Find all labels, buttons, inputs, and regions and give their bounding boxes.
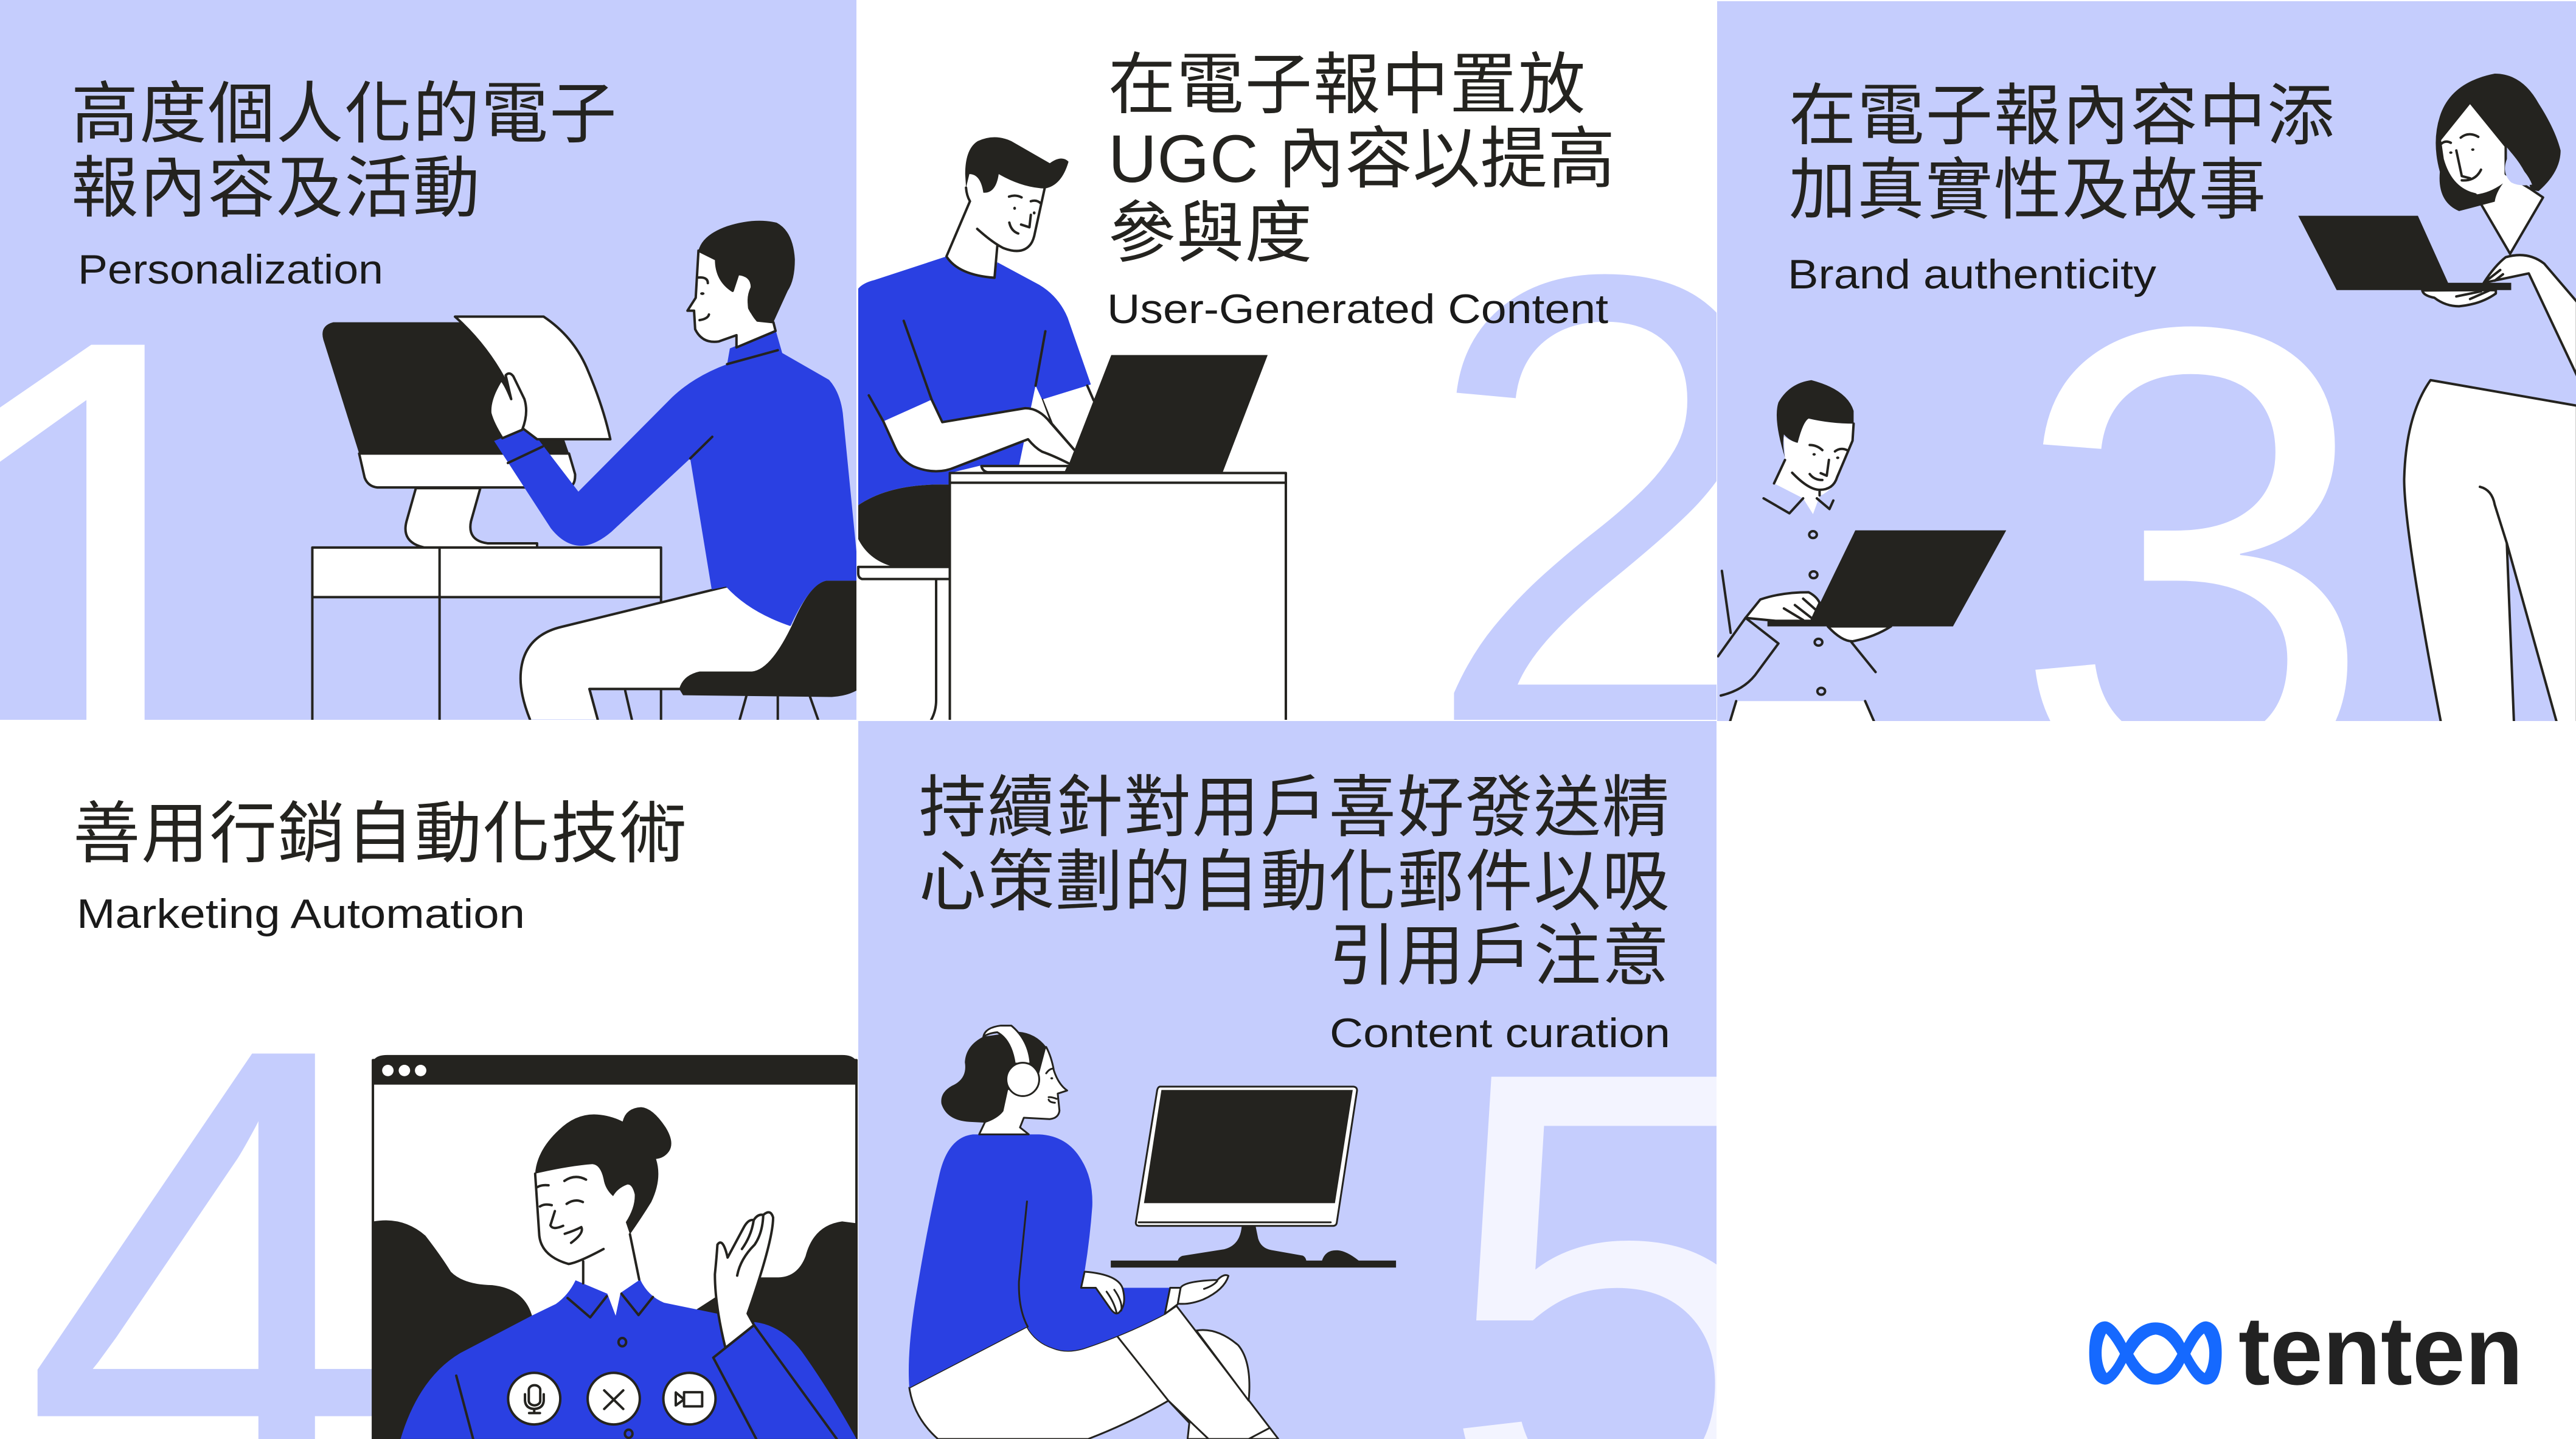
window frame: [373, 1060, 856, 1439]
subtitle 4: Marketing Automation: [77, 891, 525, 937]
subtitle 1: Personalization: [78, 246, 383, 293]
panel 5: content curation: [858, 721, 1803, 1439]
logo wordmark: tenten: [2238, 1296, 2523, 1405]
heading 5: [919, 770, 1670, 994]
icon: close: [588, 1373, 640, 1424]
heading 5: 心策劃的自動化郵件以吸: [919, 845, 1670, 919]
icon: microphone: [508, 1373, 560, 1424]
illustration: video call window: [372, 1055, 858, 1439]
heading 2: UGC 內容以提高: [1108, 122, 1616, 197]
panel 4: marketing automation: [22, 796, 858, 1439]
icon: video camera: [664, 1373, 715, 1424]
heading 5: 持續針對用戶喜好發送精: [919, 770, 1670, 845]
heading 1: 高度個人化的電子: [71, 77, 617, 152]
panel 3: brand authenticity: [1717, 1, 2576, 926]
heading 2: 在電子報中置放: [1108, 47, 1586, 122]
numeral 2: 2: [1421, 138, 1787, 874]
heading 3: 在電子報內容中添: [1789, 78, 2335, 153]
heading 1: 報內容及活動: [71, 151, 481, 226]
heading 3: [1789, 78, 2335, 228]
panel 2: user-generated content: [856, 47, 1787, 874]
illustration: woman with headphones at monitor: [909, 1026, 1396, 1439]
panel 1: personalization: [0, 0, 856, 938]
icon: logo loops: [2089, 1322, 2222, 1385]
illustration: man with laptop: [1718, 380, 2006, 722]
numeral 3: 3: [2010, 190, 2376, 926]
illustration: woman with laptop: [2298, 74, 2576, 722]
heading 1: [71, 77, 617, 226]
heading 3: 加真實性及故事: [1789, 153, 2267, 228]
illustration: man typing on laptop: [858, 138, 1286, 729]
window title bar: [372, 1055, 858, 1085]
subtitle 3: Brand authenticity: [1788, 251, 2156, 298]
subtitle 5: Content curation: [1330, 1010, 1670, 1056]
heading 2: 參與度: [1108, 196, 1313, 271]
heading 5: 引用戶注意: [1328, 919, 1670, 994]
illustration: man reading at monitor: [312, 221, 859, 719]
heading 4: 善用行銷自動化技術: [73, 796, 688, 871]
heading 2: [1108, 47, 1616, 271]
subtitle 2: User-Generated Content: [1107, 286, 1608, 332]
logo: tenten: [2089, 1296, 2523, 1405]
